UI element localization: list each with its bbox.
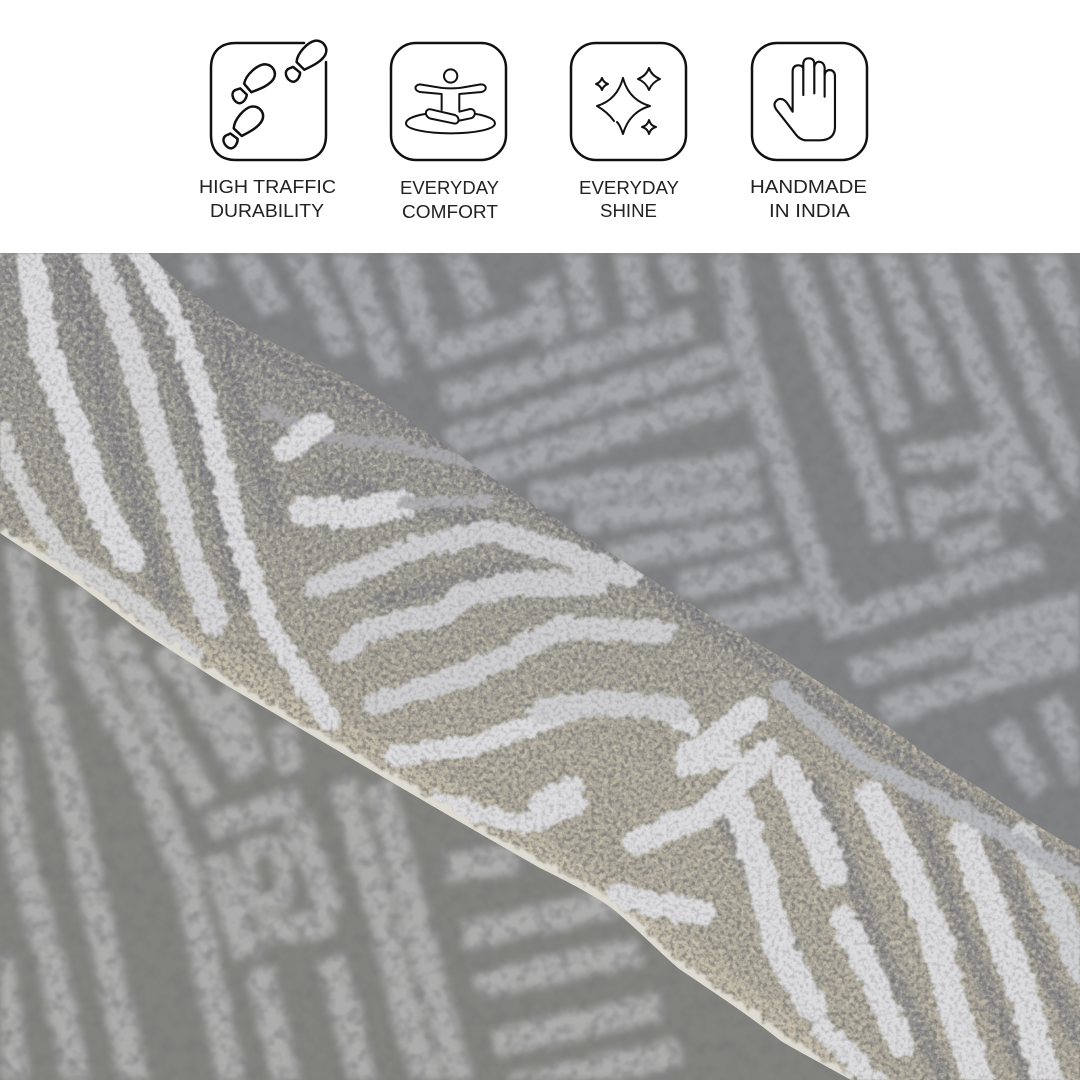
icon: raised hand, handmade in india: [752, 43, 867, 160]
label: everyday shine: SHINE: [600, 200, 657, 221]
beige woven tint near lower edge: [20, 540, 840, 1065]
white header background: [0, 0, 1080, 253]
background fibre mottling: [0, 253, 1080, 1080]
label: everyday comfort: EVERYDAY: [400, 177, 499, 198]
icon: meditating figure, everyday comfort: [391, 43, 506, 160]
white rug edge lip: [0, 533, 851, 1080]
white pile stripes: [0, 250, 1080, 1080]
rug background, upper blurred area: [0, 250, 1080, 1080]
label: handmade in india: HANDMADE: [750, 176, 867, 197]
rug photo panel: [0, 250, 1080, 1080]
dark fibre grain: [0, 253, 1080, 1080]
icon: sparkles, everyday shine: [571, 43, 686, 160]
feature labels: [199, 176, 867, 222]
icon row: [211, 36, 867, 160]
label: high traffic durability: DURABILITY: [210, 200, 324, 221]
woven fibre grain: [0, 253, 1080, 1080]
rolled rug foreground: [0, 250, 1080, 1080]
label: everyday comfort: COMFORT: [402, 201, 498, 222]
icon: footsteps, high traffic durability: [211, 36, 330, 160]
soft dark grain over pile: [0, 253, 1080, 1080]
label: high traffic durability: HIGH TRAFFIC: [199, 176, 336, 197]
label: handmade in india: IN INDIA: [769, 200, 851, 221]
rug background, lower blurred area: [0, 500, 900, 1080]
grey wool bands on roll: [70, 260, 1080, 1080]
label: everyday shine: EVERYDAY: [579, 177, 679, 198]
